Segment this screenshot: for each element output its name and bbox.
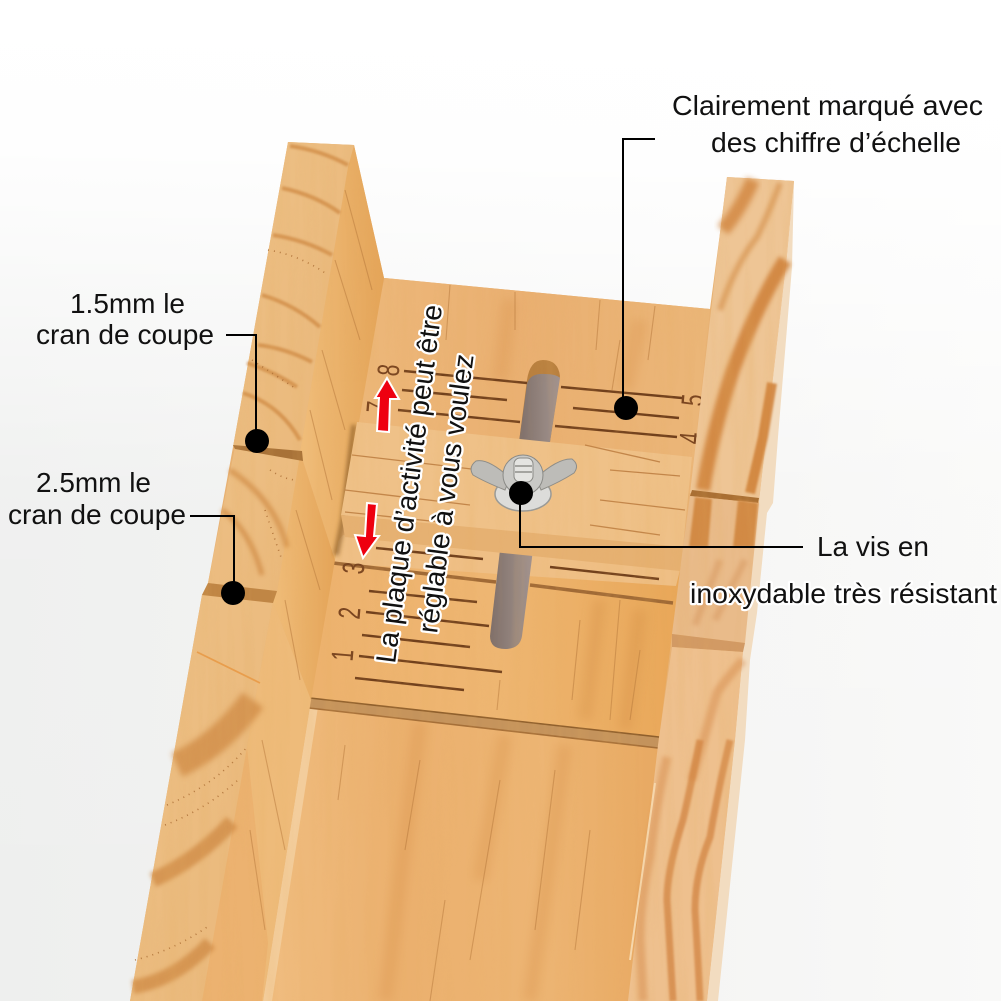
wood base silhouette xyxy=(130,142,794,1001)
leader line: 2.5mm notch xyxy=(190,516,234,593)
left wall end faces with growth rings xyxy=(130,142,354,1001)
dot: stainless screw xyxy=(509,481,533,505)
dot: scale numbers xyxy=(614,396,638,420)
label: 1.5mm notch xyxy=(36,288,214,350)
dot: 1.5mm notch xyxy=(245,429,269,453)
back floor section with upper scale xyxy=(366,278,710,444)
dot: 2.5mm notch xyxy=(221,581,245,605)
wood grain texture xyxy=(326,340,753,742)
upper scale ticks: 8 xyxy=(371,363,407,377)
label: 1.5mm notch: cran de coupe xyxy=(36,319,214,350)
adjustable sliding plate xyxy=(341,422,692,571)
label: 2.5mm notch: cran de coupe xyxy=(8,499,186,530)
rotated adjustable plate note: La plaque d’activité peut être xyxy=(370,303,448,665)
upper scale ticks: 4 xyxy=(673,431,709,445)
lower scale ticks xyxy=(325,548,673,690)
label: scale numbers: des chiffre d’échelle xyxy=(711,127,961,158)
label: 2.5mm notch: 2.5mm le xyxy=(36,467,151,498)
wooden soap cutter box xyxy=(130,142,795,1001)
rotated adjustable plate note: réglable à vous voulez xyxy=(412,352,480,635)
leader line: scale numbers xyxy=(623,139,655,408)
pale outer side xyxy=(707,181,794,1001)
label: stainless screw: La vis en xyxy=(817,531,929,562)
left wall notches xyxy=(202,445,303,603)
label: scale numbers xyxy=(672,90,983,158)
arrow: slide up xyxy=(375,378,399,432)
lower section xyxy=(628,647,743,1001)
callout: 2.5mm notch xyxy=(8,467,245,605)
upper scale ticks: 7 xyxy=(360,400,396,414)
lower slot xyxy=(490,550,533,649)
right wall xyxy=(628,177,794,1001)
callout: 1.5mm notch xyxy=(36,288,269,453)
upper scale ticks: 5 xyxy=(675,393,711,407)
leader line: stainless screw xyxy=(520,493,803,547)
front floor xyxy=(263,706,659,1001)
label: stainless screw: inoxydable très résistant xyxy=(690,578,997,609)
long cutting groove xyxy=(309,698,659,748)
label: 2.5mm notch xyxy=(8,467,186,530)
lower scale ticks: 2 xyxy=(332,606,368,620)
middle floor section with lower scale xyxy=(332,535,680,736)
stainless wing nut xyxy=(471,455,577,511)
label: stainless screw xyxy=(690,531,997,609)
upper end face xyxy=(690,177,794,502)
upper slot xyxy=(519,360,560,442)
leader line: 1.5mm notch xyxy=(226,335,256,441)
callout: stainless screw xyxy=(509,481,997,609)
arrow: slide down xyxy=(355,503,379,558)
lower notch xyxy=(672,634,745,652)
left wall inner faces xyxy=(248,145,384,1001)
middle section xyxy=(672,496,759,643)
upper scale ticks xyxy=(360,363,711,445)
lower scale ticks: 1 xyxy=(325,648,361,662)
lower scale ticks: 3 xyxy=(336,561,372,575)
upper notch xyxy=(690,490,759,503)
label: scale numbers: Clairement marqué avec xyxy=(672,90,983,121)
label: 1.5mm notch: 1.5mm le xyxy=(70,288,185,319)
callout: scale numbers xyxy=(614,90,983,420)
